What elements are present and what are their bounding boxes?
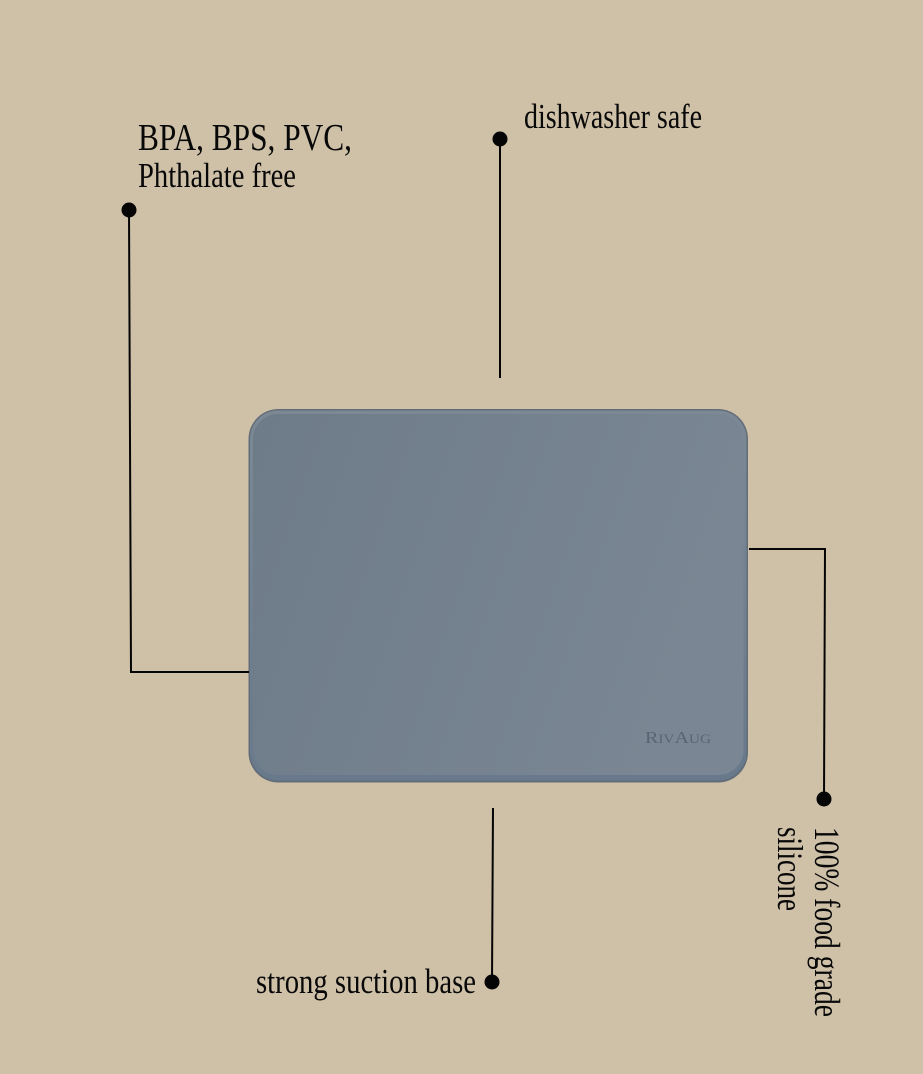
callout: BPA free: BPA, BPS, PVC, (138, 117, 352, 159)
callout: food grade silicone (749, 549, 847, 1017)
callout: strong suction base: strong suction base (256, 962, 476, 1001)
product: silicone mat (248, 409, 748, 782)
callout: dishwasher safe (492, 97, 702, 378)
callout: strong suction base (256, 808, 500, 1001)
callout: dishwasher safe: dishwasher safe (524, 97, 702, 136)
callout: food grade silicone: silicone (770, 827, 810, 911)
callout: BPA free (122, 117, 352, 672)
callout: food grade silicone: 100% food grade (807, 827, 847, 1017)
brand mark: RIVAUG (645, 728, 711, 747)
callout: BPA free: Phthalate free (138, 156, 296, 195)
